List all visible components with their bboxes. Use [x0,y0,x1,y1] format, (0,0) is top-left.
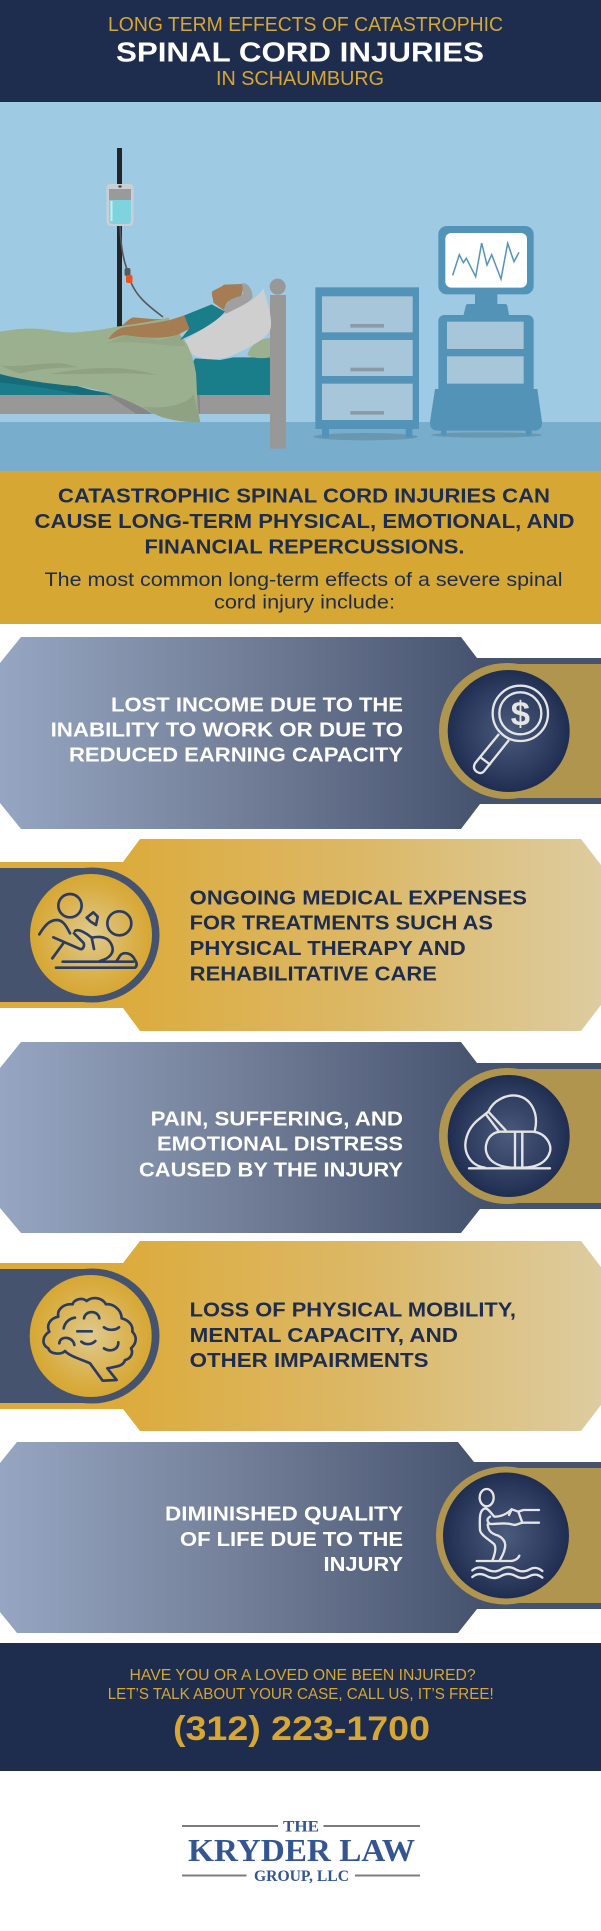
banner 2 text: REHABILITATIVE CARE [190,964,437,986]
banner 1 text: REDUCED EARNING CAPACITY [69,745,404,767]
IV tube [120,226,163,317]
logo: The Kryder Law Group: KRYDER LAW [188,1832,415,1868]
banner 3 text: EMOTIONAL DISTRESS [157,1134,403,1156]
intro heading: CATASTROPHIC SPINAL CORD INJURIES CAN [58,486,550,508]
banner 5 text: INJURY [324,1554,404,1576]
intro body text [44,569,562,614]
banner 2 text: ONGOING MEDICAL EXPENSES [190,887,527,909]
call to action footer band [0,1643,601,1771]
intro heading [34,486,574,559]
intro body text: cord injury include: [214,592,395,614]
banner 1 text: LOST INCOME DUE TO THE [111,695,403,717]
banner 5 text: OF LIFE DUE TO THE [180,1529,403,1551]
title line 1: LONG TERM EFFECTS OF CATASTROPHIC [108,14,503,36]
intro heading: FINANCIAL REPERCUSSIONS. [144,537,464,559]
bed, patient and blanket [0,279,286,449]
near arm [108,315,190,339]
banner 4: loss of mobility [0,1241,601,1431]
hospital room illustration [0,102,601,471]
banner 3: pain and suffering [0,1042,601,1233]
logo: The Kryder Law Group [182,1819,420,1885]
banner 1 text: INABILITY TO WORK OR DUE TO [51,720,403,742]
banner 1: lost income [0,637,601,829]
banner 4 text: OTHER IMPAIRMENTS [190,1350,428,1372]
banner 2 text: PHYSICAL THERAPY AND [190,938,466,960]
intro heading: CAUSE LONG-TERM PHYSICAL, EMOTIONAL, AND [34,511,574,533]
banner 2 text [190,887,527,986]
call to action text: LET’S TALK ABOUT YOUR CASE, CALL US, IT’S FREE! [108,1686,494,1703]
banner 1 text [51,695,404,767]
banner 5: quality of life [0,1442,601,1633]
far hand [122,317,170,327]
banner 5 text: DIMINISHED QUALITY [165,1504,404,1526]
banner 5 text [165,1504,404,1576]
icon: brain [30,1275,152,1397]
mattress [0,357,271,395]
banner 3 text [139,1109,404,1182]
icon: water skier [443,1472,569,1598]
call to action text: HAVE YOU OR A LOVED ONE BEEN INJURED? [130,1667,476,1684]
banner 3 text: PAIN, SUFFERING, AND [151,1109,403,1131]
blanket [0,317,200,422]
banner 4 text: MENTAL CAPACITY, AND [190,1325,458,1347]
intro panel [0,471,601,624]
pillow [184,288,271,359]
IV pole [117,148,122,328]
bed frame [0,279,286,449]
blanket folds [0,335,200,422]
heart monitor [430,226,542,438]
intro body text: The most common long-term effects of a severe spinal [44,569,562,591]
bed shadow [107,395,152,414]
title line 3: IN SCHAUMBURG [216,68,384,90]
face [212,284,243,310]
banner 2: medical expenses [0,839,601,1031]
icon: magnifying glass with dollar sign [448,670,570,792]
call to action text [108,1667,494,1703]
banner 4 text [190,1300,516,1372]
banner 4 text: LOSS OF PHYSICAL MOBILITY, [190,1300,516,1322]
header band [0,0,601,102]
logo: The Kryder Law Group: THE [283,1819,319,1836]
small pillow [247,338,270,358]
title line 2: SPINAL CORD INJURIES [116,36,484,68]
hospital gown [180,304,225,340]
icon: physical therapy [30,874,152,996]
banner 2 text: FOR TREATMENTS SUCH AS [190,913,493,935]
bedside cabinet [313,287,419,440]
IV bag [106,184,134,226]
logo: The Kryder Law Group: GROUP, LLC [254,1868,349,1885]
icon: magnifying glass with dollar sign: $ [511,696,530,734]
IV clamp [124,268,132,283]
hair [223,283,253,314]
banner 3 text: CAUSED BY THE INJURY [139,1160,404,1182]
icon: pills [448,1075,570,1197]
phone number: (312) 223-1700 [173,1710,430,1748]
